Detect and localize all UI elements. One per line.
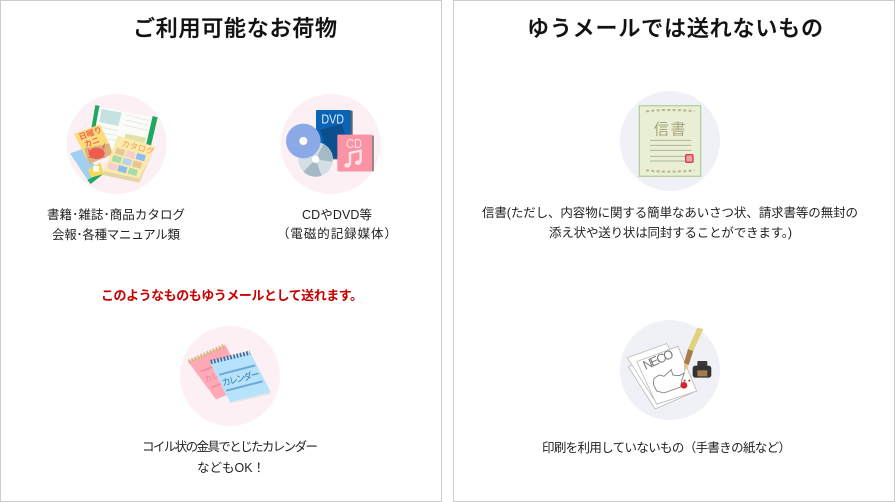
text: calendar description: などもOK！ xyxy=(197,461,265,475)
title: not sendable items: ゆうメールでは送れないもの xyxy=(527,16,823,41)
icon: books and catalog: カタログ xyxy=(120,138,155,157)
icon: handwritten paper with pen and ink xyxy=(620,320,720,420)
text: letter description: 信書(ただし、内容物に関する簡単なあいさつ状、請求書等の無封の xyxy=(482,205,858,220)
text: CD and DVD description: （電磁的記録媒体） xyxy=(277,226,397,241)
icon: CD and DVD: CD xyxy=(346,137,362,151)
text: calendar description xyxy=(142,439,318,475)
text: books description: 書籍･雑誌･商品カタログ xyxy=(47,207,185,222)
panel: not sendable items xyxy=(454,0,894,502)
icon: handwritten paper with pen and ink: NECO xyxy=(641,347,676,373)
text: letter description xyxy=(482,205,858,240)
text: books description: 会報･各種マニュアル類 xyxy=(52,227,180,242)
text: books description xyxy=(47,207,185,242)
icon: CD and DVD: DVD xyxy=(321,113,344,127)
icon: letter document: 信書 xyxy=(654,121,686,138)
icon: CD and DVD xyxy=(281,94,381,194)
title: available items: ご利用可能なお荷物 xyxy=(133,16,337,41)
text: letter description: 添え状や送り状は同封することができます。) xyxy=(549,225,792,240)
icon: books and catalog: カニ xyxy=(83,135,101,149)
text: CD and DVD description: CDやDVD等 xyxy=(302,207,372,222)
icon: coil calendars: カレ xyxy=(203,370,221,385)
icon: coil calendars: カレンダー xyxy=(220,368,261,388)
icon: coil calendars xyxy=(180,326,280,426)
text: CD and DVD description xyxy=(277,207,397,241)
callout: also sendable: このようなものもゆうメールとして送れます。 xyxy=(101,288,363,303)
text: handwritten description: 印刷を利用していないもの（手書きの紙など） xyxy=(542,441,791,455)
text: calendar description: コイル状の金具でとじたカレンダー xyxy=(142,439,318,454)
icon: letter document xyxy=(620,91,720,191)
icon: books and catalog xyxy=(67,94,167,194)
panel: available items xyxy=(0,0,442,502)
icon: books and catalog: 日曜り xyxy=(78,125,103,142)
